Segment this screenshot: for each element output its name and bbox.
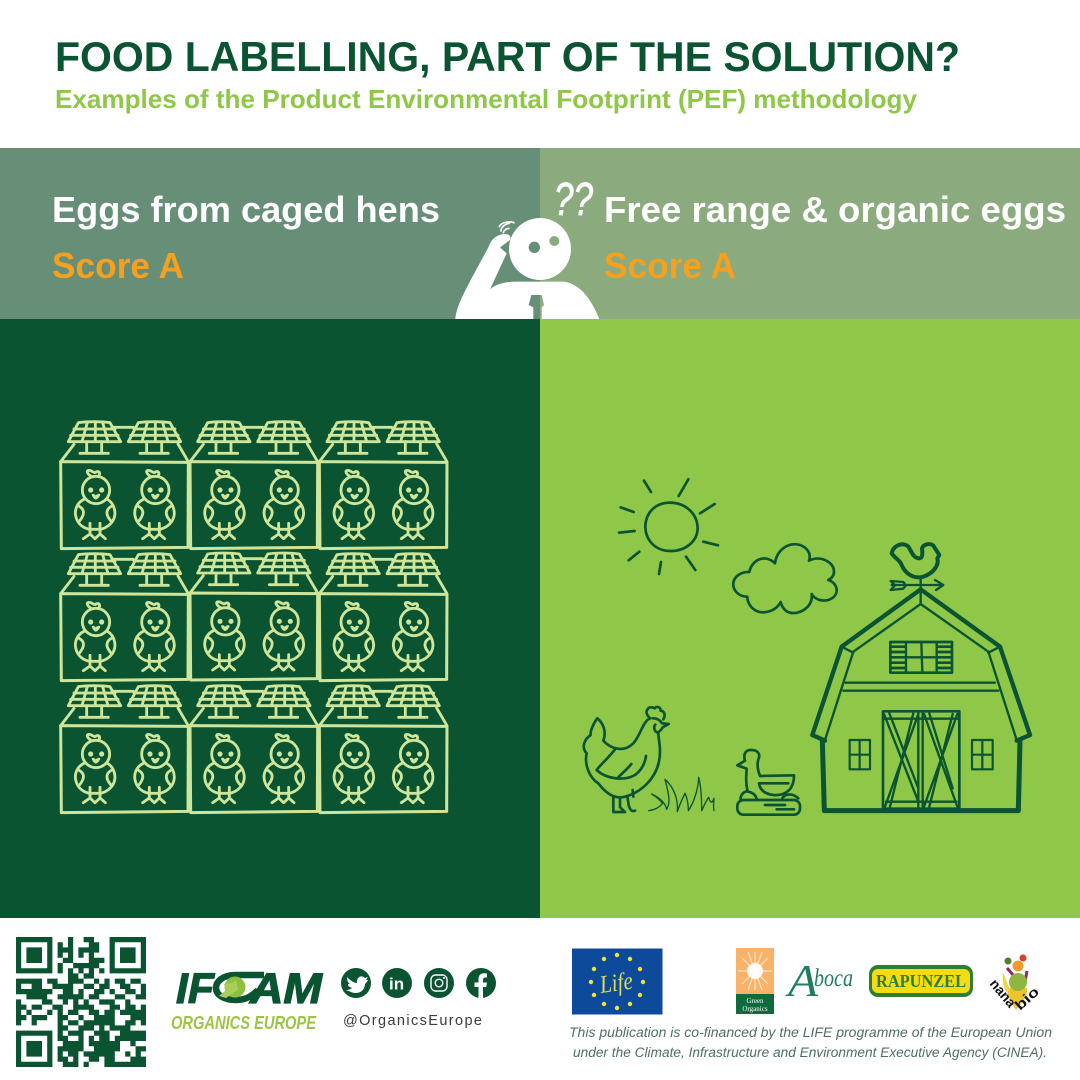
icon: linkedin: [382, 968, 412, 998]
icon: twitter: [341, 968, 371, 998]
roof: [812, 589, 1030, 741]
logo: IFOAM Organics Europe: [171, 965, 323, 1033]
icon: Europe globe: [216, 975, 264, 1000]
subtitle: Examples of the Product Environmental Footprint (PEF) methodology: [55, 84, 918, 114]
logo: Green Organics: Organics: [742, 1005, 768, 1013]
logo: Rapunzel: RAPUNZEL: [876, 971, 966, 991]
logo: Aboca: boca: [814, 965, 853, 992]
title: FOOD LABELLING, PART OF THE SOLUTION?: [55, 33, 960, 80]
funding statement: [569, 1025, 1052, 1060]
icon: sun: [619, 479, 718, 574]
logo: Rapunzel: [869, 965, 973, 997]
icon: barn with weathervane: [812, 544, 1030, 811]
icon: hen: [584, 707, 669, 812]
line one: This publication is co-financed by the LIFE programme of the European Union: [569, 1025, 1052, 1040]
panel: caged hens header: [0, 148, 540, 319]
panel: caged hens illustration: [0, 319, 540, 918]
walls: [822, 741, 1020, 811]
logo: nana bio: bio: [1011, 983, 1042, 1013]
logo: Green Organics: Green: [746, 997, 764, 1005]
score: caged hens: Score A: [52, 245, 184, 286]
social handle: @OrganicsEurope: [343, 1013, 482, 1029]
panel: free range header: [540, 148, 1080, 319]
hayloft band: [843, 683, 998, 691]
logo: nana bio: nana: [987, 976, 1020, 1011]
barn doors: [883, 711, 959, 809]
panel: free range illustration: [540, 319, 1080, 918]
social icons: [341, 968, 496, 998]
icon: nesting hen: [737, 750, 800, 815]
QR code: [16, 940, 146, 1064]
logo: nana bio: [987, 954, 1042, 1013]
icon: cloud: [733, 544, 837, 613]
logo: Aboca: [785, 956, 853, 1006]
logo: LIFE EU flag: [572, 948, 662, 1014]
organics europe: ORGANICS EUROPE: [171, 1013, 317, 1033]
wordmark left: IF: [176, 965, 216, 1013]
side windows: [850, 740, 993, 769]
logo: LIFE EU flag: Life: [597, 968, 634, 999]
icon: grid of cages with chicks: [61, 422, 447, 813]
icon: thinking person: [455, 218, 599, 319]
line two: under the Climate, Infrastructure and Environment Executive Agency (CINEA).: [573, 1045, 1047, 1060]
icon: facebook: [466, 968, 496, 998]
icon: linkedin: in: [389, 974, 404, 994]
logo: Aboca: A: [785, 956, 819, 1006]
wordmark right: AM: [249, 965, 323, 1013]
logo: Green Organics: [736, 948, 774, 1014]
heading: free range: Free range & organic eggs: [604, 189, 1066, 230]
heading: caged hens: Eggs from caged hens: [52, 189, 440, 230]
question marks: ??: [554, 173, 593, 225]
icon: instagram: [424, 968, 454, 998]
weathervane: [891, 544, 943, 590]
score: free range: Score A: [604, 245, 736, 286]
hayloft window: [890, 642, 952, 673]
icon: grass: [649, 777, 714, 812]
